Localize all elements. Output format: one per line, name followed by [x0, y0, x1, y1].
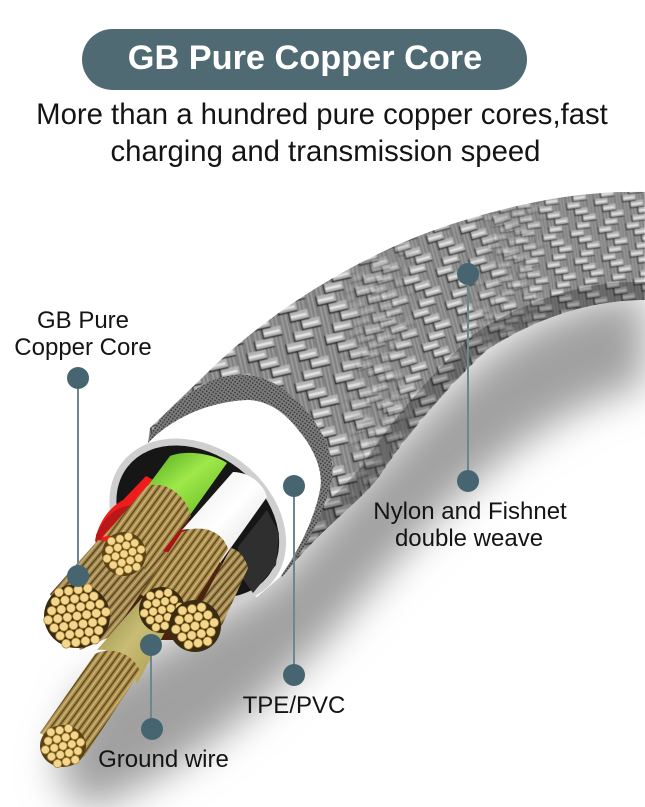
sheath cut edge — [148, 375, 333, 577]
ground wire olive sleeve — [97, 598, 165, 684]
middle copper strand end — [137, 586, 187, 634]
white inner jacket — [120, 400, 321, 597]
black wire sleeve — [238, 510, 279, 593]
callout: GB Pure Copper Core — [14, 307, 152, 587]
callout: TPE/PVC — [243, 475, 345, 719]
ground copper wire — [37, 651, 140, 770]
braided cable sheath — [148, 192, 645, 577]
cast shadow — [55, 292, 645, 807]
copper bundle: upper wire — [98, 485, 191, 579]
copper bundle: large wire — [50, 540, 168, 650]
copper bundle: middle wire — [140, 529, 228, 620]
subtitle: More than a hundred pure copper cores,fast — [36, 98, 608, 131]
green wire — [147, 453, 227, 515]
title pill: GB Pure Copper Core — [128, 39, 482, 77]
callout: GB Pure Copper Core: Copper Core — [14, 334, 152, 361]
callout: Nylon and Fishnet double weave: Nylon and Fishnet — [373, 498, 567, 525]
callout: Ground wire — [98, 634, 229, 773]
white wire — [182, 472, 267, 563]
copper bundle: lower right wire — [200, 548, 248, 636]
large copper strand end — [40, 581, 114, 651]
callout: TPE/PVC: TPE/PVC — [243, 692, 345, 719]
callout: Nylon and Fishnet double weave: double weave — [395, 525, 543, 552]
callout: GB Pure Copper Core: GB Pure — [37, 307, 129, 334]
callout: Ground wire: Ground wire — [98, 746, 229, 773]
red wire and filler behind the copper — [95, 476, 235, 640]
subtitle: charging and transmission speed — [111, 135, 540, 168]
cable opening ring — [77, 404, 319, 639]
subtitle — [36, 98, 608, 168]
callout: Nylon and Fishnet double weave — [373, 263, 567, 552]
lower right copper strand end — [168, 600, 222, 652]
title pill — [82, 29, 527, 90]
